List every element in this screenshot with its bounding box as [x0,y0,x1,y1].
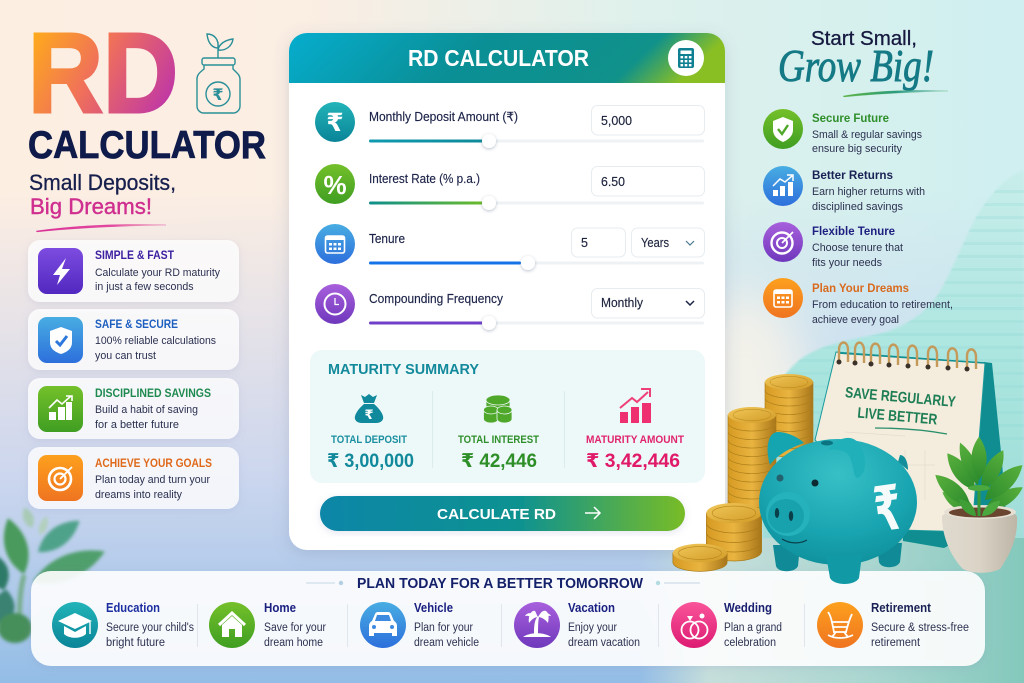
goal: vacation: Enjoy your [568,622,617,634]
benefit: plan your dreams [763,278,953,326]
goal: retirement: Secure & stress-free [871,622,969,634]
heading: start small grow big: Grow Big! [778,40,934,91]
goal: wedding: Plan a grand [724,622,782,634]
benefit: plan your dreams: From education to retirement, [812,299,953,311]
row: tenure: Years [641,236,669,250]
row: monthly deposit: ₹ [326,109,344,137]
card: simple and fast: SIMPLE & FAST [95,250,174,262]
goal: vacation [514,601,640,649]
goal: wedding: Wedding [724,601,772,615]
goal: home: dream home [264,637,323,649]
card: disciplined savings: Build a habit of saving [95,404,198,416]
benefit: better returns: disciplined savings [812,201,903,213]
maturity amount [586,389,684,472]
benefit: secure future: ensure big security [812,143,902,155]
goal: education: Secure your child's [106,622,194,634]
icon: jar with sprout and rupee [197,34,240,113]
goal: vehicle: Plan for your [414,622,473,634]
row: tenure [315,224,704,270]
goal: vehicle: dream vehicle [414,637,479,649]
row: interest rate: % [323,170,347,200]
card: disciplined savings [28,378,239,439]
row: interest rate: Interest Rate (% p.a.) [369,172,480,186]
benefit: flexible tenure: Flexible Tenure [812,224,895,238]
illustration: potted plant [930,437,1024,573]
title: CALCULATOR: CALCULATOR [28,124,266,167]
goal: retirement: retirement [871,637,921,649]
benefit: flexible tenure: fits your needs [812,257,882,269]
card: safe and secure: 100% reliable calculations [95,335,216,347]
title: RD: RD [28,10,178,136]
button: calculate RD: CALCULATE RD [437,506,556,523]
row: monthly deposit [315,102,704,148]
card: achieve your goals: ACHIEVE YOUR GOALS [95,458,212,470]
goal: home: Home [264,601,296,615]
tagline: Small Deposits, [29,170,176,195]
heading: start small grow big [778,27,948,97]
total interest [458,395,539,472]
benefit: plan your dreams: achieve every goal [812,314,899,326]
calendar text [844,384,956,434]
total interest: ₹ 42,446 [461,451,537,472]
goal: home [209,601,326,649]
total deposit [327,394,414,472]
card: achieve your goals: Plan today and turn your [95,474,210,486]
goal: vacation: Vacation [568,601,615,615]
row: compounding frequency: Monthly [601,296,644,310]
panel: maturity summary: MATURITY SUMMARY [328,362,479,378]
calculator header: RD CALCULATOR [408,45,589,71]
tagline: Big Dreams! [30,194,152,219]
panel: maturity summary [310,350,705,483]
calendar text: SAVE REGULARLY [844,384,956,411]
goal: vehicle: Vehicle [414,601,453,615]
card: safe and secure: SAFE & SECURE [95,319,178,331]
maturity amount: MATURITY AMOUNT [586,434,684,446]
illustration: piggy bank: ₹ [870,473,906,545]
panel: calculator [289,33,725,550]
row: interest rate [315,164,704,210]
goal: retirement: Retirement [871,601,932,615]
card: simple and fast [28,240,239,302]
benefit: flexible tenure: Choose tenure that [812,242,903,254]
benefit: better returns [763,166,925,213]
icon: jar with sprout and rupee: ₹ [212,87,224,104]
panel: benefits list [763,109,953,326]
tagline [29,170,176,232]
row: monthly deposit: 5,000 [601,114,632,128]
total interest: TOTAL INTEREST [458,434,539,446]
goal: education [52,601,194,649]
goal: education: Education [106,601,160,615]
row: tenure: Tenure [369,232,405,246]
benefit: better returns: Earn higher returns with [812,186,925,198]
card: achieve your goals: dreams into reality [95,489,182,501]
illustration: piggy bank [759,432,917,584]
card: simple and fast: Calculate your RD maturity [95,267,220,279]
goal: education: bright future [106,637,165,649]
row: monthly deposit: Monthly Deposit Amount (₹) [369,110,518,124]
card: simple and fast: in just a few seconds [95,281,194,293]
goal: vehicle [360,601,479,649]
total deposit: TOTAL DEPOSIT [331,434,407,446]
benefit: secure future: Secure Future [812,111,889,125]
card: safe and secure: you can trust [95,350,156,362]
goal: retirement [817,601,969,649]
total deposit: ₹ [364,407,374,422]
card: achieve your goals [28,447,239,509]
calendar text: LIVE BETTER [857,405,938,428]
plan heading: PLAN TODAY FOR A BETTER TOMORROW [357,576,643,592]
maturity amount: ₹ 3,42,446 [586,451,680,472]
benefit: secure future [763,109,922,155]
row: compounding frequency: Compounding Frequency [369,292,504,306]
card: disciplined savings: DISCIPLINED SAVINGS [95,388,211,400]
heading: start small grow big: Start Small, [811,27,917,50]
illustration: desk calendar [815,342,1006,548]
calculator header [289,33,725,83]
row: interest rate: 6.50 [601,175,625,189]
illustration: gold coin stacks [673,374,813,571]
benefit: secure future: Small & regular savings [812,129,922,141]
benefit: better returns: Better Returns [812,168,893,182]
card: disciplined savings: for a better future [95,419,179,431]
row: tenure: 5 [581,236,588,250]
panel: plan today [31,571,985,666]
goal: wedding [671,601,782,649]
button: calculate RD [320,496,685,531]
benefit: flexible tenure [763,222,903,269]
goal: vacation: dream vacation [568,637,640,649]
row: compounding frequency [315,284,704,330]
goal: wedding: celebration [724,637,776,649]
goal: home: Save for your [264,622,326,634]
total deposit: ₹ 3,00,000 [327,451,414,472]
panel: feature cards [28,240,239,509]
bottom-left plant [0,506,110,643]
card: safe and secure [28,309,239,370]
benefit: plan your dreams: Plan Your Dreams [812,281,909,295]
